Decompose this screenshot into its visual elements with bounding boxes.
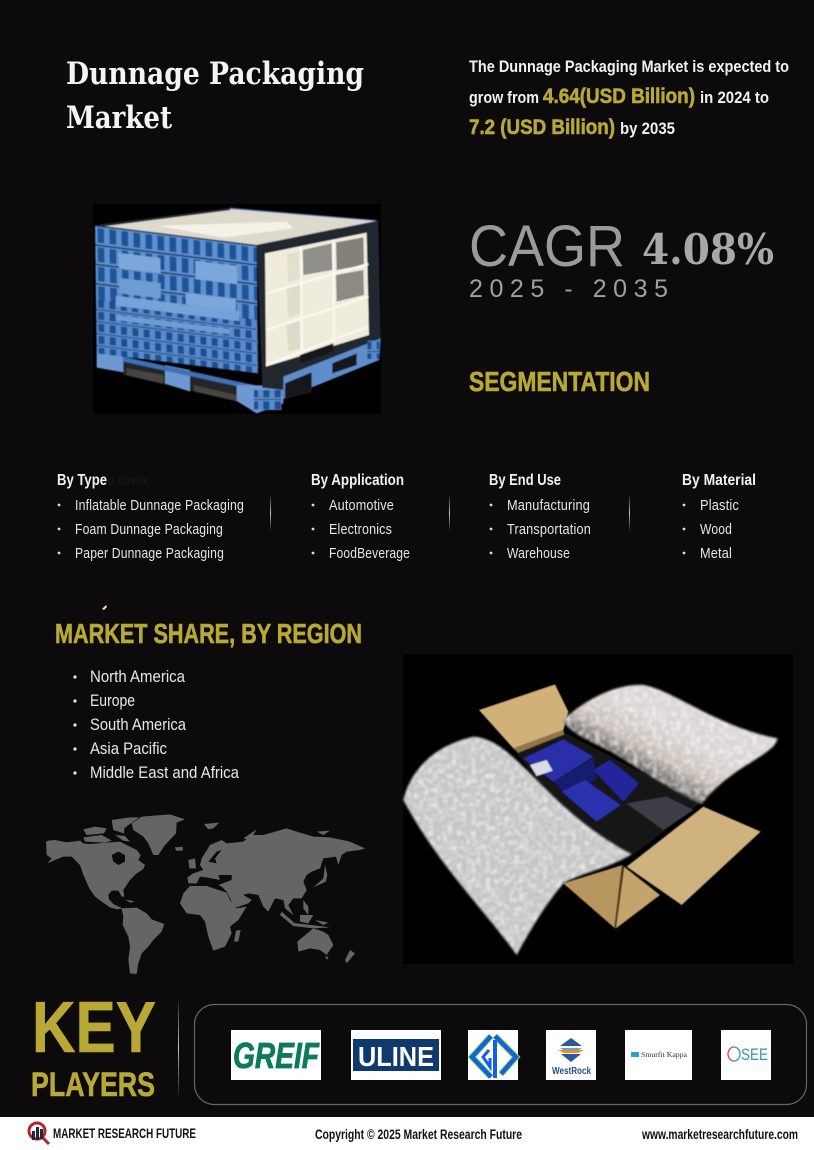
title: Dunnage Packaging	[66, 56, 364, 92]
segment column: by material: Metal	[700, 545, 732, 562]
title: Market	[66, 100, 173, 136]
logo: Uline: ULINE	[358, 1041, 434, 1072]
region list: South America	[90, 715, 186, 734]
South America	[122, 908, 164, 974]
logo: Smurfit Kappa	[625, 1030, 692, 1080]
CAGR figure: 2025 - 2035	[469, 275, 668, 303]
segment column: by type: Foam Dunnage Packaging	[75, 521, 223, 538]
region list: Middle East and Africa	[90, 763, 239, 782]
segment column: by type: Paper Dunnage Packaging	[75, 545, 224, 562]
footer brand name: MARKET RESEARCH FUTURE	[53, 1125, 196, 1141]
CAGR figure: 4.08%	[642, 225, 774, 274]
market forecast summary: 7.2 (USD Billion)	[469, 116, 615, 139]
market forecast summary: by 2035	[620, 120, 675, 138]
white divider cells	[265, 233, 369, 367]
segment column: by material: By Material	[682, 472, 756, 489]
region list: Europe	[90, 691, 135, 710]
segment column: by end use: By End Use	[489, 472, 561, 489]
footer bar	[0, 1117, 814, 1150]
right bubble wrap	[563, 685, 777, 804]
logo: SEE	[721, 1030, 771, 1080]
logo: Greif	[231, 1030, 321, 1080]
logo: Smurfit Kappa: Smurfit Kappa	[641, 1050, 688, 1059]
market forecast summary	[469, 58, 789, 139]
logo: Uline	[351, 1030, 441, 1080]
segment column: by application: FoodBeverage	[329, 545, 410, 562]
crate left face	[95, 225, 258, 373]
logo: WestRock: WestRock	[552, 1066, 591, 1077]
segment column: by application: Electronics	[329, 521, 392, 538]
dark contents	[627, 797, 693, 830]
stray mark	[102, 605, 107, 610]
CAGR figure: CAGR	[469, 214, 625, 279]
blue product boxes	[523, 739, 593, 782]
left bubble wrap	[403, 737, 632, 955]
segment column: by end use: Manufacturing	[507, 497, 590, 514]
logo: GA	[468, 1030, 518, 1080]
logo: WestRock	[546, 1030, 596, 1080]
CAGR figure	[469, 214, 774, 303]
segmentation heading: SEGMENTATION	[469, 366, 650, 397]
crate pallet corner cells	[254, 390, 281, 410]
box flaps	[479, 684, 568, 748]
market forecast summary: in 2024 to	[700, 89, 769, 107]
key players heading: KEY	[32, 988, 156, 1068]
logo: Greif: GREIF	[233, 1035, 320, 1076]
segment column: by end use: Transportation	[507, 521, 591, 538]
market forecast summary: grow from	[469, 89, 539, 107]
Africa	[180, 886, 247, 951]
North America	[46, 840, 145, 909]
region list: North America	[90, 667, 185, 686]
image: plastic pallet crate with dunnage dividers	[93, 204, 381, 414]
segment column: by end use	[489, 472, 591, 562]
region list	[73, 667, 239, 782]
market forecast summary: 4.64(USD Billion)	[543, 85, 695, 108]
Greenland	[132, 814, 185, 855]
segment column: by type: 0.08%X	[108, 476, 149, 488]
market share heading: MARKET SHARE, BY REGION	[55, 618, 362, 649]
key players panel	[194, 1004, 806, 1104]
crate open top	[100, 209, 375, 245]
segment column: by type: Inflatable Dunnage Packaging	[75, 497, 244, 514]
footer logo icon	[29, 1123, 49, 1144]
crate right face frame	[257, 221, 381, 390]
key players heading	[31, 988, 156, 1104]
segment column: by application: By Application	[311, 472, 404, 489]
logo: SEE: SEE	[741, 1045, 768, 1064]
Southeast Asia islands	[280, 912, 297, 926]
segment column: by application: Automotive	[329, 497, 394, 514]
segment column: by material	[682, 472, 756, 562]
segment column: by material: Wood	[700, 521, 732, 538]
segment column: by material: Plastic	[700, 497, 739, 514]
title	[66, 56, 364, 136]
Australia and New Zealand	[297, 928, 333, 955]
image: bubble wrap in cardboard box	[403, 654, 793, 964]
world map	[46, 814, 365, 974]
segment column: by type	[57, 472, 244, 562]
Eurasia	[187, 828, 365, 915]
segment column: by end use: Warehouse	[507, 545, 570, 562]
key players heading: PLAYERS	[31, 1066, 155, 1104]
crate pallet base	[123, 358, 260, 402]
region list: Asia Pacific	[90, 739, 167, 758]
crate back wall	[230, 208, 377, 232]
segment column: by application	[311, 472, 410, 562]
footer copyright: Copyright © 2025 Market Research Future	[315, 1127, 522, 1142]
segment column: by type: By Type	[57, 472, 107, 489]
